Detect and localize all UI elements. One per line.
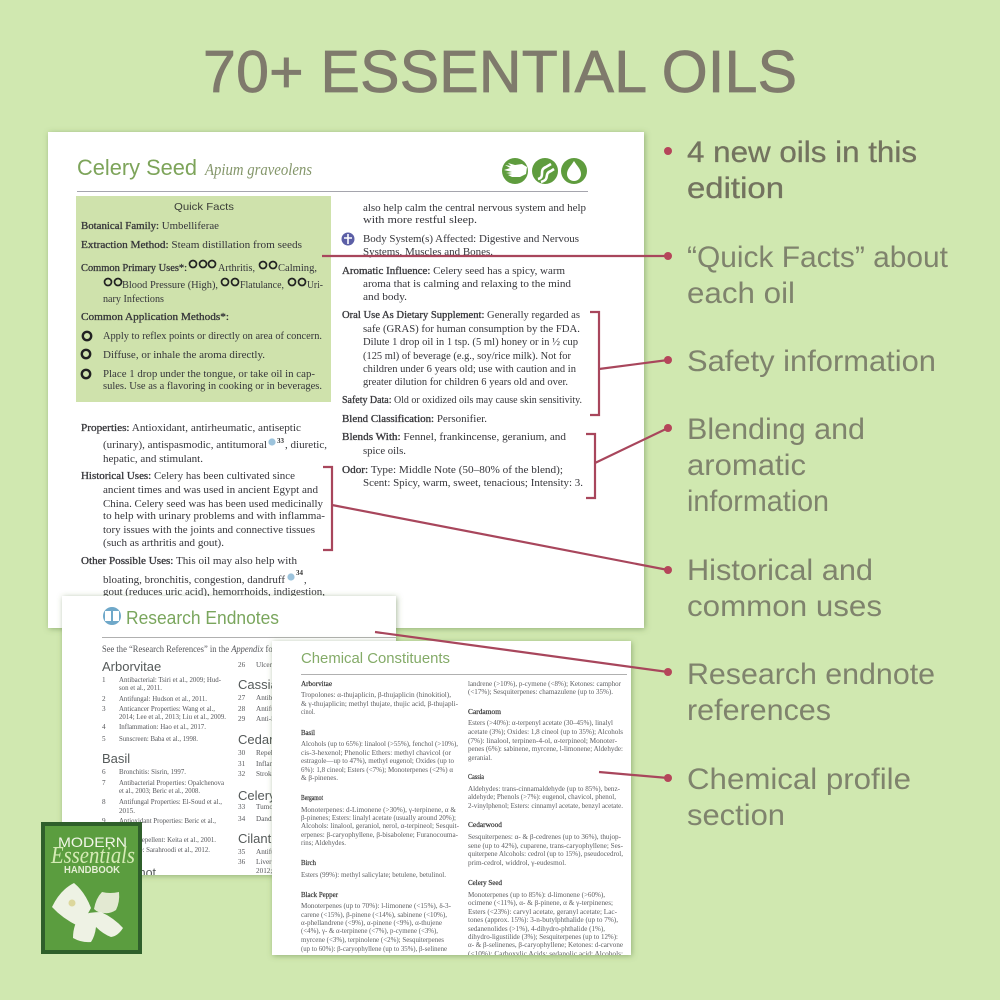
heading: Chemical Constituents: Chemical Constituents (301, 651, 450, 667)
text block: properties and uses: hepatic, and stimulant. (103, 454, 203, 465)
text block: constituents right column: α- & β-selinenes, β-caryophyllene; Ketones: d-carvone (468, 940, 624, 949)
panel: Quick Facts: Diffuse, or inhale the aroma directly. (103, 350, 265, 361)
list: endnotes column 2: 33 (238, 803, 246, 811)
callout lines (322, 252, 672, 782)
text block: constituents right column: tones (approx. 15%): 3-n-butylphthalide (up to 7%), (468, 915, 618, 924)
panel: Quick Facts: Arthritis, (218, 263, 255, 274)
bullet: new oils: edition (687, 172, 784, 205)
panel: Quick Facts (76, 196, 331, 402)
list: endnotes column 1: et al., 2003; Beric et al., 2008. (119, 787, 200, 795)
text block: right column: Odor: Type: Middle Note (50–80% of the blend); (342, 465, 563, 476)
text block: right column: (125 ml) of beverage (e.g., soy/rice milk). Not for (363, 351, 571, 362)
list: endnotes column 2: 36 (238, 858, 246, 866)
text block: properties and uses: (such as arthritis and gout). (103, 538, 224, 549)
text block: right column: Blend Classification: Personifier. (342, 414, 487, 425)
text block: right column: greater dilution for children 6 years old and over. (363, 377, 568, 388)
text block: constituents left column: Black Pepper (301, 890, 339, 899)
label: historical (687, 554, 882, 623)
list: endnotes column 1: 2014; Lee et al., 2013; Liu et al., 2009. (119, 713, 226, 721)
panel: Quick Facts: Common Primary Uses*: (81, 263, 187, 274)
list: endnotes column 2: Antifungal (256, 705, 287, 713)
text block: right column: children under 6 years old; use with caution and in (363, 364, 577, 375)
list: endnotes column 1: Sedative: Sarahroodi et al., 2012. (119, 846, 210, 854)
text block: right column: Safety Data: Old or oxidized oils may cause skin sensitivity. (342, 395, 582, 406)
text block: right column: aroma that is calming and relaxing to the mind (363, 279, 572, 290)
panel: Quick Facts: Calming, (278, 263, 317, 274)
label: quick facts: each oil (687, 277, 795, 310)
list: endnotes column 1: Insect Repellent: Keita et al., 2001. (119, 836, 216, 844)
panel: Research Endnotes (62, 596, 396, 880)
list: endnotes column 2: Liver (256, 858, 272, 866)
list: endnotes column 2: Tumors (256, 803, 278, 811)
list: endnotes column 1: Sunscreen: Baba et al., 1998. (119, 735, 198, 743)
text block: properties and uses: , diuretic, (285, 440, 327, 451)
text block: constituents left column: β-pinenes; Esters: linalyl acetate (usually around 20%); (301, 813, 456, 822)
text block: constituents right column: Celery Seed (468, 878, 502, 887)
panel: Quick Facts: nary Infections (103, 294, 164, 305)
text block: constituents left column: myrcene (<3%), terpinolene (<2%); Sesquiterpenes (301, 935, 444, 944)
list: endnotes column 2: Antifungal (256, 848, 287, 856)
list: endnotes column 1: Antibacterial: Tsiri et al., 2009; Hud- (119, 676, 222, 684)
list: endnotes column 2: 29 (238, 715, 246, 723)
list: endnotes column 1: Antibacterial Properties: Opalchenova (119, 779, 225, 787)
text block: constituents left column: (up to 60%): β-caryophyllene (up to 35%), β-selinene (301, 944, 448, 953)
text block: properties and uses: 33 (277, 437, 284, 445)
text block: constituents left column: estragole—up to 47%), methyl eugenol; Oxides (up to (301, 756, 454, 765)
panel: Quick Facts: Flatulance, (240, 280, 284, 291)
text block: properties and uses: (urinary), antispasmodic, antitumoral (103, 440, 267, 451)
text block: properties and uses: to help with urinary problems and with inflamma- (103, 511, 326, 522)
text block: properties and uses: ancient times and was used in ancient Egypt and (103, 485, 319, 496)
text block: constituents right column: landrene (>10%), p-cymene (<8%); Ketones: camphor (468, 679, 621, 688)
text block: constituents left column (301, 679, 460, 953)
text block: properties and uses: Other Possible Uses: This oil may also help with (81, 556, 298, 567)
text block: constituents right column: (<10%); Carboxylic Acids: sedanolic acid; Alcohols: (468, 949, 623, 958)
list: endnotes column 2: Cassia (238, 677, 279, 692)
text block: right column: spice oils. (363, 446, 406, 457)
list: endnotes column 1: Antifungal: Hudson et al., 2011. (119, 695, 207, 703)
book cover: Modern Essentials Handbook: MODERN (58, 834, 127, 850)
list: endnotes column 2: Celery Seed (238, 788, 310, 803)
text block: constituents left column: Birch (301, 858, 316, 867)
label: safety: Safety information (687, 345, 936, 378)
label: quick facts (687, 241, 949, 310)
panel: Celery Seed page (48, 132, 644, 628)
text block: right column: with more restful sleep. (363, 215, 477, 226)
text block: constituents right column: aldehyde; Phenols (>7%): eugenol, chavicol, phenol, (468, 792, 616, 801)
list: endnotes column 1: 8 (102, 798, 106, 806)
text block: constituents left column: α-phellandrene (<9%), α-pinene (<9%), α-thujene (301, 918, 443, 927)
text block: properties and uses: tory issues with the joints and connective tissues (103, 525, 315, 536)
text block: properties and uses: Properties: Antioxidant, antirheumatic, antiseptic (81, 423, 301, 434)
text block: right column: Dilute 1 drop oil in 1 tsp. (5 ml) honey or in ½ cup (363, 337, 578, 348)
heading: Celery Seed (77, 155, 312, 180)
list: endnotes column 2: Dandruff (256, 815, 283, 823)
label: blending: information (687, 485, 829, 518)
list: endnotes column 2: 26 (238, 661, 246, 669)
text block: constituents left column: Bergamot (301, 793, 324, 802)
list: endnotes column 1: Bronchitis: Sisrin, 1997. (119, 768, 186, 776)
text block: constituents left column: cis-3-hexenol; Phenolic Ethers: methyl chavicol (or (301, 748, 452, 757)
text block: constituents right column: ocimene (<11%), α- & β-pinene, α & γ-terpinenes; (468, 898, 613, 907)
list: endnotes column 2: Repellent (256, 749, 284, 757)
text block: properties and uses: , (304, 575, 307, 586)
text block: constituents right column: Esters (>40%): α-terpenyl acetate (30–45%), linalyl (468, 718, 613, 727)
text block: properties and uses: bloating, bronchitis, congestion, dandruff (103, 575, 286, 586)
list: endnotes column 2 (238, 662, 272, 874)
list: endnotes column 2: 28 (238, 705, 246, 713)
text block: right column: Aromatic Influence: Celery seed has a spicy, warm (342, 266, 565, 277)
arrow: safety information (590, 312, 672, 415)
text block: right column (342, 203, 586, 489)
text block: constituents left column: 6%): 1,8 cineol; Esters (<7%); Monoterpenes (<2%) α (301, 765, 453, 774)
panel: Chemical Constituents (272, 641, 631, 958)
text block: right column: Systems, Muscles and Bones. (363, 247, 493, 258)
title: 70+ ESSENTIAL OILS (203, 39, 797, 105)
label: blending: Blending and (687, 413, 865, 446)
list: endnotes column 1: 3 (102, 705, 106, 713)
text block: constituents right column: Cedarwood (468, 820, 502, 829)
text block: constituents right column: Aldehydes: trans-cinnamaldehyde (up to 85%), benz- (468, 784, 621, 793)
text block: constituents left column: Arborvitae (301, 679, 333, 688)
list: endnotes column 2: Cilantro (238, 831, 283, 846)
text block: constituents left column: (<4%), γ- & α-terpinene (<7%), p-cymene (<3%), (301, 926, 438, 935)
book cover: Modern Essentials Handbook: HANDBOOK (64, 864, 120, 876)
list: endnotes column 2: 32 (238, 770, 246, 778)
text block: constituents right column: prim-cedrol, widdrol, γ-eudesmol. (468, 858, 566, 867)
text block: constituents right column: quiterpene Alcohols: cedrol (up to 15%), pseudocedrol, (468, 849, 623, 858)
text block: constituents right column: Cassia (468, 772, 485, 781)
arrow: chemical profile (599, 772, 672, 782)
text block: right column: Body System(s) Affected: Digestive and Nervous (363, 234, 579, 245)
heading: Celery Seed: Celery Seed (77, 155, 197, 180)
list: endnotes column 1: 2 (102, 695, 106, 703)
list: endnotes column 2: Ulcers (256, 661, 275, 669)
list: endnotes column 2: 31 (238, 760, 246, 768)
label: blending (687, 413, 865, 518)
text block: properties and uses: gout (reduces uric acid), hemorrhoids, indigestion, (103, 587, 325, 598)
panel: Quick Facts: Extraction Method: Steam distillation from seeds (81, 240, 302, 251)
panel: Quick Facts: Place 1 drop under the tongue, or take oil in cap- (103, 369, 316, 380)
icon: body system (342, 232, 354, 246)
list: endnotes column 2: 30 (238, 749, 246, 757)
text block: properties and uses: China. Celery seed was has been used medicinally (103, 499, 324, 510)
text block: constituents left column: rins; Aldehydes. (301, 838, 346, 847)
book cover: Modern Essentials Handbook: Essentials (50, 843, 135, 869)
list: endnotes column 2: 35 (238, 848, 246, 856)
text block: constituents left column: cinol. (301, 707, 315, 716)
list: endnotes column 2: 34 (238, 815, 246, 823)
list: endnotes column 1: 6 (102, 768, 106, 776)
arrow: research endnotes (375, 632, 672, 676)
list: endnotes column 1: son et al., 2011. (119, 684, 162, 692)
panel: Quick Facts: sules. Use as a flavoring in cooking or in beverages. (103, 381, 322, 392)
label: historical: Historical and (687, 554, 873, 587)
text block: constituents left column: & γ-thujaplicin; methyl thujate, thujic acid, β-thujapli- (301, 699, 459, 708)
list: endnotes column 1: Arborvitae (102, 659, 161, 674)
list: endnotes column 1: 9 (102, 817, 106, 825)
bullet: new oils: 4 new oils in this (687, 136, 917, 169)
label: chemical: Chemical profile (687, 763, 911, 796)
text block: right column: Scent: Spicy, warm, sweet, tenacious; Intensity: 3. (363, 478, 583, 489)
panel: Quick Facts: Common Application Methods*: (81, 312, 229, 323)
list: endnotes column 2: Anti-inflammatory (256, 715, 311, 723)
text block: constituents right column: 2-vinylphenol; Esters: cinnamyl acetate, benzyl acetate. (468, 801, 623, 810)
list: endnotes column 1: Antifungal Properties: El-Soud et al., (119, 798, 222, 806)
text block: constituents left column: Tropolones: α-thujaplicin, β-thujaplicin (hinokitiol), (301, 690, 451, 699)
bullet: new oils (664, 136, 917, 205)
icons: application method glyphs (82, 260, 306, 378)
text block: right column: and body. (363, 292, 407, 303)
list: endnotes column 1: Inflammation: Hao et al., 2017. (119, 723, 206, 731)
icons: application methods (502, 158, 587, 184)
text block: properties and uses (81, 423, 327, 598)
text block: right column: Oral Use As Dietary Supplement: Generally regarded as (342, 310, 580, 321)
list: endnotes column 2: 27 (238, 694, 246, 702)
list: endnotes column 1: Antioxidant Properties: Beric et al., (119, 817, 216, 825)
list: endnotes column 2: Stroke (256, 770, 275, 778)
text block: constituents right column: (7%): linalool, terpinen-4-ol, α-terpineol; Monoter- (468, 736, 618, 745)
text block: constituents left column: Esters (99%): methyl salicylate; betulene, betulinol. (301, 870, 446, 879)
label: chemical: section (687, 799, 785, 832)
text block: constituents left column: Monoterpenes: d-Limonene (>30%), γ-terpinene, α & (301, 805, 456, 814)
label: chemical (687, 763, 911, 832)
text block: right column: safe (GRAS) for human consumption by the FDA. (363, 324, 580, 335)
text block: constituents right column: Cardamom (468, 707, 501, 716)
label: blending: aromatic (687, 449, 806, 482)
label: quick facts: “Quick Facts” about (687, 241, 949, 274)
text block: constituents right column: sedanenolides (>1%), 4-dihydro-phthalide (1%), (468, 924, 605, 933)
icon: white flowers (52, 883, 123, 942)
label: historical: common uses (687, 590, 882, 623)
arrow: historical uses (323, 467, 672, 574)
label: research: references (687, 694, 831, 727)
text block: constituents left column: Monoterpenes (up to 70%): l-limonene (<15%), δ-3- (301, 901, 452, 910)
text block: constituents right column: Esters (<23%): carvyl acetate, geranyl acetate; Lac- (468, 907, 618, 916)
list: endnotes column 1: 1 (102, 676, 106, 684)
text block: constituents right column: geranial. (468, 753, 492, 762)
text block: constituents right column: Monoterpenes (up to 85%): d-limonene (>60%), (468, 890, 605, 899)
arrow: quick facts (322, 252, 672, 260)
panel: Quick Facts: Botanical Family: Umbelliferae (81, 221, 219, 232)
text block: constituents left column: Basil (301, 728, 315, 737)
list: endnotes column 1: 7 (102, 779, 106, 787)
text block: constituents right column: (<17%); Sesquiterpenes: chamazulene (up to 35%). (468, 687, 613, 696)
list: endnotes column 1: Basil (102, 751, 130, 766)
text block: constituents left column: Alcohols (up to 65%): linalool (>55%), fenchol (>10%), (301, 739, 458, 748)
panel: Quick Facts: Uri- (307, 280, 323, 291)
list: endnotes column 1: Bergamot (102, 865, 156, 880)
list: endnotes column 1: Anticancer Properties: Wang et al., (119, 705, 215, 713)
text block: right column: Blends With: Fennel, frankincense, geranium, and (342, 432, 567, 443)
list: endnotes column 2: Inflammation (256, 760, 296, 768)
list: endnotes column 1: 5 (102, 735, 106, 743)
text block: constituents left column: carene (<15%), β-pinene (<14%), sabinene (<10%), (301, 910, 447, 919)
text block: constituents left column: Alcohols: linalool, geraniol, nerol, α-terpineol; Sesquit- (301, 821, 460, 830)
panel: Quick Facts: Quick Facts (174, 201, 234, 213)
text block: constituents right column: penes (6%): sabinene, myrcene, l-limonene; Aldehyde: (468, 744, 623, 753)
text block: constituents right column: dihydro-ligustilide (3%); Sesquiterpenes (up to 12%): (468, 932, 618, 941)
heading: Research Endnotes: Research Endnotes (126, 608, 279, 628)
text block: constituents left column: & β-pinenes. (301, 773, 338, 782)
panel: Quick Facts: Blood Pressure (High), (122, 280, 218, 291)
book cover: Modern Essentials Handbook (41, 822, 142, 954)
text block: constituents right column: acetate (3%); Oxides: 1,8 cineol (up to 35%); Alcohols (468, 727, 623, 736)
list: endnotes column 1 (102, 659, 226, 880)
arrow: blending and aromatic (586, 424, 672, 498)
list: endnotes column 2: 2012; (256, 867, 272, 875)
list: endnotes column 1: 4 (102, 723, 106, 731)
text block: constituents right column: Sesquiterpenes: α- & β-cedrenes (up to 36%), thujop- (468, 832, 622, 841)
text block: properties and uses: 34 (296, 569, 304, 577)
text block: right column: also help calm the central nervous system and help (363, 203, 586, 214)
text block: properties and uses: Historical Uses: Celery has been cultivated since (81, 471, 295, 482)
panel: Research Endnotes: See the “Research References” in the Appendix for details. (102, 644, 302, 654)
icon: open book (103, 607, 121, 625)
list: endnotes column 2: Antibacterial (256, 694, 294, 702)
label: research (687, 658, 935, 727)
text block: constituents right column (468, 679, 624, 958)
text block: constituents left column: erpenes: β-caryophyllene, β-bisabolene; Furanocouma- (301, 830, 459, 839)
label: research: Research endnote (687, 658, 935, 691)
panel: Quick Facts: Apply to reflex points or directly on area of concern. (103, 331, 322, 342)
heading: Celery Seed: Apium graveolens (204, 160, 312, 179)
list: endnotes column 1: 2015. (119, 807, 135, 815)
text block: constituents right column: sene (up to 42%), cuparene, trans-caryophyllene; Ses- (468, 841, 624, 850)
list: endnotes column 2: Cedarwood (238, 732, 304, 747)
